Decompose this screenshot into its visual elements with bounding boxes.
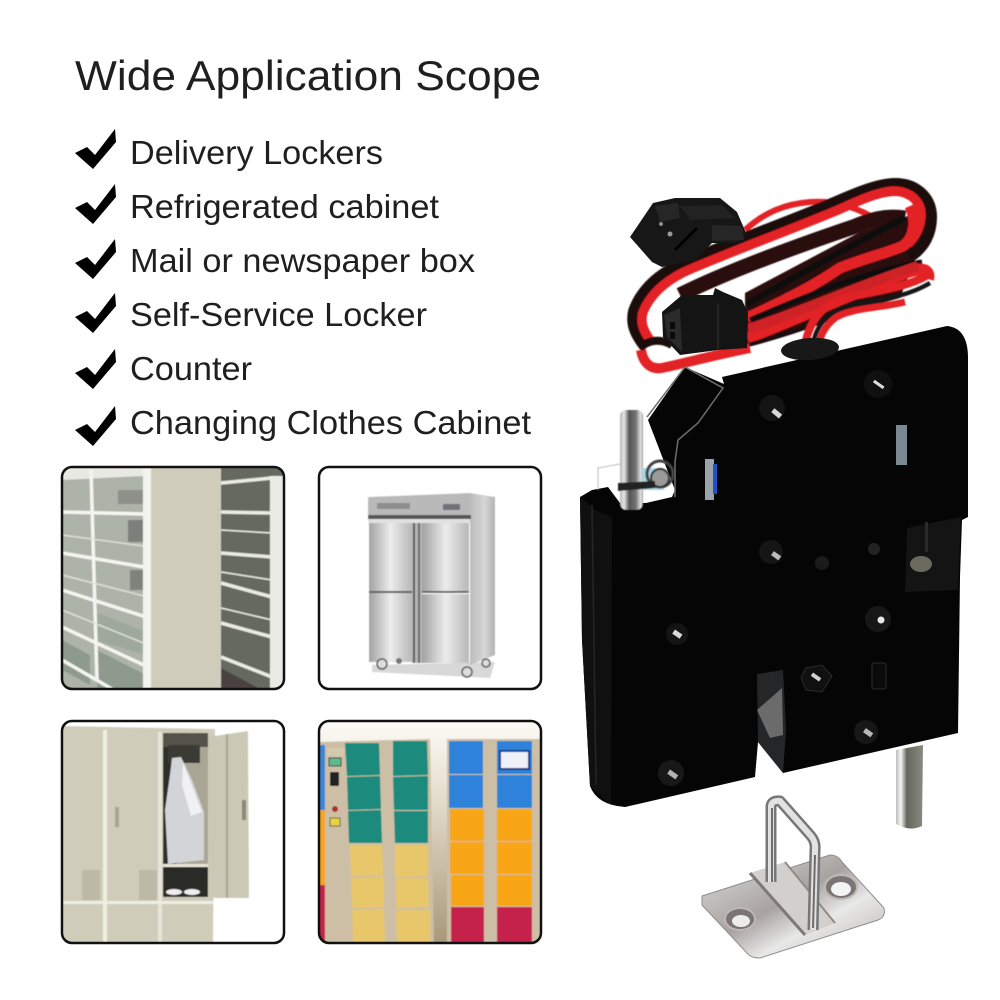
- panel: changing clothes cabinet: [62, 721, 284, 943]
- panel: refrigerated cabinet: [319, 467, 541, 689]
- wire loop: [771, 801, 815, 930]
- product: electric lock body: [580, 326, 968, 807]
- connector: upper plug: [630, 198, 746, 267]
- item: Changing Clothes Cabinet: Changing Clothes Cabinet: [130, 404, 531, 441]
- left locker frame: [319, 739, 434, 943]
- wire: thin black centre: [747, 218, 905, 304]
- cable grommet: [780, 336, 840, 362]
- cabinet top control band: [368, 493, 470, 518]
- latch window: [905, 517, 961, 592]
- far-left strip: [319, 745, 325, 810]
- open interior: [176, 746, 208, 864]
- floor shadow: [372, 662, 495, 678]
- item: Counter: [75, 349, 252, 389]
- item: Delivery Lockers: [75, 129, 383, 171]
- left edge face: [580, 497, 612, 805]
- item: Delivery Lockers: Delivery Lockers: [130, 134, 383, 171]
- panel: delivery locker shelves: [62, 467, 284, 689]
- hanging shirt: [165, 757, 204, 864]
- left pane shading: [118, 490, 143, 504]
- panel: self-service colour lockers: [319, 721, 541, 943]
- wire: return bend: [805, 276, 926, 345]
- main loop: red conductor: [642, 191, 921, 340]
- product: wire harness: [636, 187, 930, 368]
- teal doors: [345, 743, 380, 776]
- rivets: [658, 370, 892, 786]
- castors: [377, 659, 387, 669]
- wire: red twin under the loop: [747, 206, 914, 318]
- right shelf frames: [221, 478, 272, 677]
- item: Counter: Counter: [130, 350, 252, 387]
- latch notch: [757, 670, 786, 773]
- rear thin red arc: [745, 202, 880, 230]
- shadowed wire band: [680, 217, 905, 295]
- control panel: [328, 748, 344, 756]
- locking bolt: [896, 745, 923, 829]
- dark fill behind bundle: [745, 216, 914, 345]
- lock case: [580, 326, 968, 807]
- shoe shelf: [163, 864, 208, 867]
- item: Self-Service Locker: Self-Service Locker: [130, 296, 427, 333]
- wire: lower red bundle with black top: [750, 262, 922, 320]
- mounting holes: [725, 908, 755, 930]
- central door: [143, 467, 151, 689]
- cabinet side: [470, 493, 495, 665]
- item: Refrigerated cabinet: Refrigerated cabinet: [130, 188, 439, 225]
- bracket outline: [647, 367, 723, 497]
- slot: right: [896, 425, 907, 465]
- right locker frame: [447, 739, 541, 943]
- strike plate with loop: [702, 801, 884, 958]
- cabinet body: [63, 726, 215, 943]
- vents: [82, 870, 157, 900]
- doors: [369, 523, 412, 592]
- connector: lower plug: [662, 288, 748, 355]
- title: Wide Application Scope: [75, 52, 541, 99]
- application checklist: [75, 129, 531, 446]
- base plate: [702, 855, 884, 958]
- blue doors: [449, 741, 483, 774]
- open door: [208, 731, 249, 898]
- red doors: [451, 907, 484, 943]
- orange doors: [450, 809, 484, 841]
- main loop: black sheath: [636, 187, 928, 345]
- spring pin assembly: [598, 410, 673, 510]
- item: Mail or newspaper box: Mail or newspaper box: [130, 242, 476, 279]
- slot: left: [705, 459, 717, 500]
- raised ridge: [750, 862, 835, 935]
- lower loop: [641, 348, 750, 368]
- left shelf frames: [62, 470, 148, 689]
- yellow doors: [350, 845, 383, 876]
